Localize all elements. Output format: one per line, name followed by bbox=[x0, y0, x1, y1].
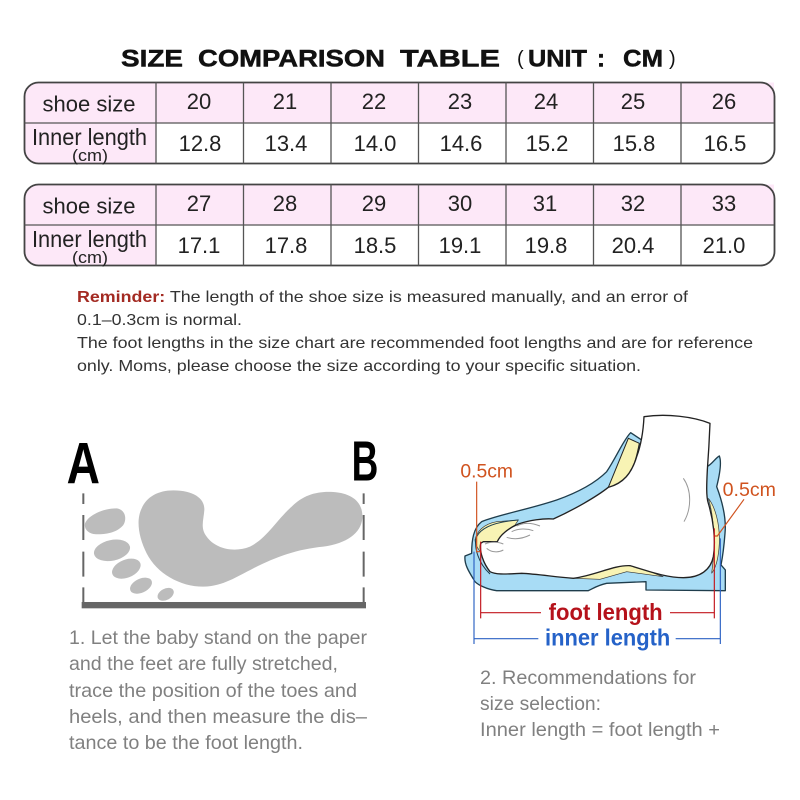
measurement: right 0.5cm bbox=[713, 480, 776, 536]
toes bbox=[85, 508, 176, 603]
toe and ankle creases bbox=[485, 478, 690, 552]
measurement: right 0.5cm: 0.5cm bbox=[723, 480, 776, 501]
row: inner lengths 17.1-21.0: 18.5 bbox=[354, 233, 396, 258]
panel: size table 20-26 bbox=[24, 82, 774, 165]
padding: toe bbox=[475, 520, 518, 553]
row: inner lengths 17.1-21.0: 17.8 bbox=[265, 233, 307, 258]
row: shoe sizes 27-33: 32 bbox=[621, 191, 645, 216]
row: shoe sizes 20-26: 25 bbox=[621, 89, 645, 114]
instruction 1 text: heels, and then measure the dis– bbox=[69, 706, 367, 728]
reminder text: The foot lengths in the size chart are recommended foot lengths and are for reference bbox=[77, 335, 753, 352]
title: UNIT bbox=[528, 46, 587, 72]
row: inner lengths 12.8-16.5: 13.4 bbox=[265, 131, 307, 156]
row: shoe sizes 20-26: shoe size bbox=[43, 92, 135, 116]
diagram: footprint measurement bbox=[67, 431, 378, 608]
title: SIZE bbox=[121, 46, 183, 72]
diagram: foot in shoe cross-section bbox=[460, 415, 776, 650]
title: COMPARISON bbox=[198, 46, 385, 72]
row: inner lengths 17.1-21.0: 17.1 bbox=[178, 233, 220, 258]
row: inner lengths 12.8-16.5: 12.8 bbox=[179, 131, 221, 156]
title: : bbox=[597, 46, 605, 72]
measurement: left 0.5cm bbox=[460, 461, 513, 552]
row: shoe sizes 27-33: 30 bbox=[448, 191, 472, 216]
row: shoe sizes 27-33: 28 bbox=[273, 191, 297, 216]
row: inner lengths 17.1-21.0: 19.1 bbox=[439, 233, 481, 258]
title: TABLE bbox=[400, 46, 500, 72]
panel: size table 27-33 bbox=[24, 184, 774, 267]
row: shoe sizes 20-26: 20 bbox=[187, 89, 211, 114]
title: CM bbox=[623, 46, 663, 72]
row: inner lengths 17.1-21.0 bbox=[32, 226, 745, 267]
reminder text: Reminder: The length of the shoe size is measured manually, and an error of bbox=[77, 289, 689, 306]
shoe body bbox=[465, 433, 725, 591]
row: shoe sizes 27-33: 29 bbox=[362, 191, 386, 216]
row: shoe sizes 20-26 bbox=[43, 89, 736, 116]
measurement: inner length: inner length bbox=[545, 624, 670, 650]
row: shoe sizes 20-26: 21 bbox=[273, 89, 297, 114]
instruction 1 text bbox=[69, 627, 368, 754]
row: inner lengths 12.8-16.5: 14.6 bbox=[440, 131, 482, 156]
label A: A bbox=[67, 431, 100, 496]
label B: B bbox=[352, 431, 378, 494]
row: inner lengths 12.8-16.5: 14.0 bbox=[354, 131, 396, 156]
measurement: foot length bbox=[481, 528, 714, 625]
reminder text bbox=[77, 289, 753, 375]
instruction 2 text: 2. Recommendations for bbox=[480, 667, 697, 689]
instruction 1 text: trace the position of the toes and bbox=[69, 680, 357, 702]
footprint sole bbox=[139, 490, 362, 587]
row: inner lengths 17.1-21.0: Inner length bbox=[32, 226, 147, 252]
row: shoe sizes 27-33: shoe size bbox=[43, 194, 135, 218]
instruction 1 text: tance to be the foot length. bbox=[69, 732, 303, 754]
instruction 2 text: Inner length = foot length + bbox=[480, 719, 720, 741]
title: ( bbox=[517, 48, 524, 70]
row: shoe sizes 27-33: 33 bbox=[712, 191, 736, 216]
instruction 1 text: 1. Let the baby stand on the paper bbox=[69, 627, 368, 649]
measurement: inner length bbox=[474, 538, 720, 650]
row: inner lengths 17.1-21.0: 19.8 bbox=[525, 233, 567, 258]
instruction 2 text bbox=[480, 667, 720, 741]
row: inner lengths 12.8-16.5: 16.5 bbox=[704, 131, 746, 156]
reminder text: only. Moms, please choose the size according to your specific situation. bbox=[77, 358, 641, 375]
row: shoe sizes 20-26: 24 bbox=[534, 89, 558, 114]
foot bbox=[480, 415, 714, 578]
row: inner lengths 17.1-21.0: 20.4 bbox=[612, 233, 654, 258]
measurement: foot length: foot length bbox=[549, 599, 663, 625]
measurement: left 0.5cm: 0.5cm bbox=[460, 461, 513, 482]
row: inner lengths 17.1-21.0: (cm) bbox=[72, 249, 108, 267]
row: inner lengths 17.1-21.0: 21.0 bbox=[703, 233, 745, 258]
row: inner lengths 12.8-16.5: (cm) bbox=[72, 147, 108, 165]
row: inner lengths 12.8-16.5 bbox=[32, 124, 746, 165]
instruction 2 text: size selection: bbox=[480, 693, 601, 715]
shoe inner liner bbox=[476, 520, 518, 574]
row: shoe sizes 27-33 bbox=[43, 191, 736, 218]
padding: top of foot bbox=[608, 438, 639, 487]
title: ) bbox=[669, 48, 676, 70]
padding: sole bbox=[573, 565, 663, 579]
base line bbox=[82, 602, 366, 608]
padding: heel bbox=[708, 498, 719, 573]
row: shoe sizes 27-33: 27 bbox=[187, 191, 211, 216]
title bbox=[121, 46, 676, 72]
row: inner lengths 12.8-16.5: 15.2 bbox=[526, 131, 568, 156]
row: inner lengths 12.8-16.5: Inner length bbox=[32, 124, 147, 150]
row: shoe sizes 20-26: 23 bbox=[448, 89, 472, 114]
instruction 1 text: and the feet are fully stretched, bbox=[69, 653, 338, 675]
row: inner lengths 12.8-16.5: 15.8 bbox=[613, 131, 655, 156]
row: shoe sizes 20-26: 26 bbox=[712, 89, 736, 114]
row: shoe sizes 27-33: 31 bbox=[533, 191, 557, 216]
dashed guide lines bbox=[83, 493, 364, 603]
reminder text: 0.1–0.3cm is normal. bbox=[77, 312, 242, 329]
row: shoe sizes 20-26: 22 bbox=[362, 89, 386, 114]
